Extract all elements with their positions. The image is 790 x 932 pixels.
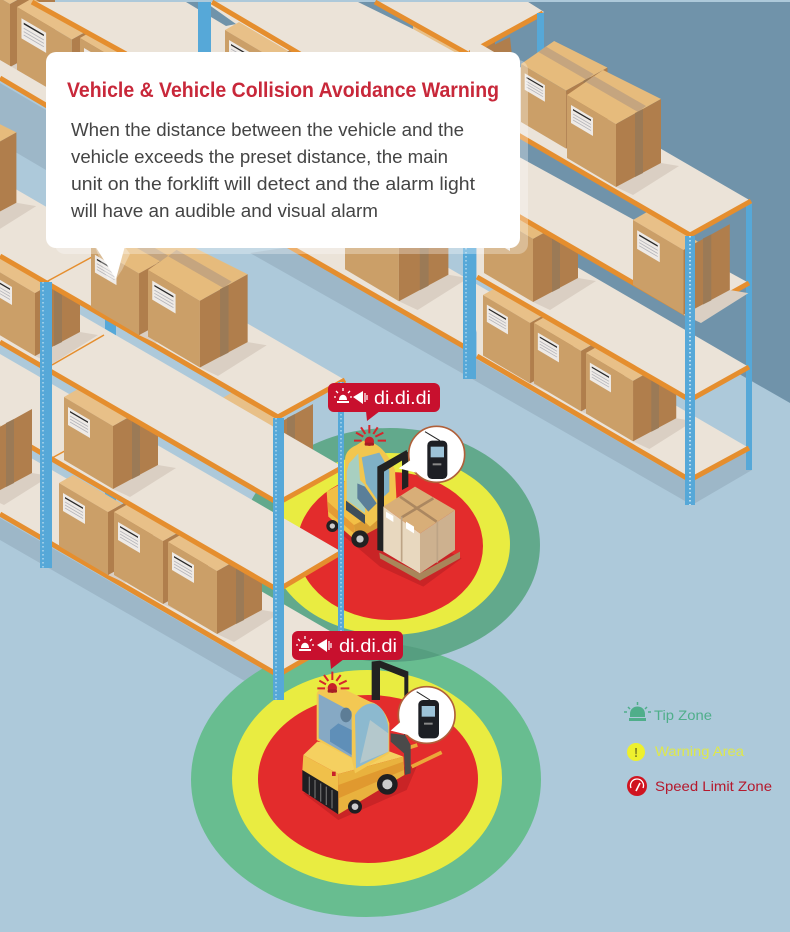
forklift one cab bbox=[345, 441, 397, 527]
alert bubble: second forklift: di.di.di bbox=[339, 636, 397, 656]
callout body text: When the distance between the vehicle and the bbox=[71, 119, 464, 140]
top row of shelving bbox=[0, 0, 544, 138]
box on second right shelf bbox=[633, 212, 748, 323]
shelf unit: left bbox=[0, 100, 345, 700]
beacon two bbox=[317, 672, 349, 693]
callout body text: unit on the forklift will detect and the alarm light bbox=[71, 173, 475, 194]
boxes on top right shelf bbox=[521, 41, 679, 195]
zone rings: second forklift bbox=[191, 642, 541, 917]
device callout one bbox=[399, 426, 465, 482]
forklift two mast bbox=[372, 661, 411, 775]
left posts bbox=[40, 282, 344, 700]
box on third right shelf bbox=[484, 185, 596, 310]
boxes on top left shelf bbox=[0, 100, 267, 376]
forks bbox=[407, 745, 442, 767]
alert bubble: first forklift bbox=[328, 383, 440, 421]
box on second left shelf bbox=[0, 256, 98, 364]
forklift two cab bbox=[317, 684, 389, 773]
siren and speaker icons bbox=[296, 636, 331, 652]
forklift one body bbox=[326, 482, 380, 548]
shelf unit: right bbox=[463, 38, 752, 505]
boxes on lowest left shelf bbox=[59, 475, 280, 642]
boxes on third left shelf bbox=[0, 389, 331, 505]
legend bbox=[624, 702, 772, 796]
shelf behind the upper left unit bbox=[0, 60, 125, 152]
floor shadow under shelving bbox=[0, 83, 752, 697]
siren and speaker icons bbox=[334, 388, 367, 404]
box on middle shelf bbox=[345, 172, 468, 310]
callout body text bbox=[70, 119, 475, 221]
beacon one bbox=[354, 425, 386, 446]
shelf unit: middle bbox=[280, 170, 490, 350]
legend: warning area: ! bbox=[634, 745, 638, 760]
legend: speed limit zone: Speed Limit Zone bbox=[655, 778, 772, 794]
alert bubble: second forklift bbox=[292, 631, 403, 669]
boxes on lowest right shelf bbox=[483, 287, 694, 449]
top row boxes bbox=[0, 0, 513, 138]
callout body text: vehicle exceeds the preset distance, the main bbox=[71, 146, 448, 167]
callout heading: Vehicle & Vehicle Collision Avoidance Warning bbox=[67, 79, 499, 102]
forklift one with pallet bbox=[326, 425, 465, 587]
pallet load bbox=[379, 487, 460, 581]
forklift one mast bbox=[377, 450, 408, 552]
zone rings: first forklift bbox=[240, 428, 540, 662]
right posts bbox=[463, 236, 695, 505]
device callout two bbox=[391, 687, 455, 743]
legend: speed limit zone bbox=[627, 776, 772, 796]
legend: warning area: Warning Area bbox=[655, 743, 744, 759]
forklift two body bbox=[302, 742, 404, 814]
back wall bbox=[87, 2, 790, 403]
callout body text: will have an audible and visual alarm bbox=[70, 200, 378, 221]
legend: tip zone: Tip Zone bbox=[654, 707, 712, 723]
legend: warning area bbox=[627, 743, 744, 761]
callout panel bbox=[46, 52, 528, 280]
forklift two bbox=[302, 661, 455, 820]
legend: tip zone bbox=[624, 702, 712, 723]
alert bubble: first forklift: di.di.di bbox=[374, 388, 431, 408]
